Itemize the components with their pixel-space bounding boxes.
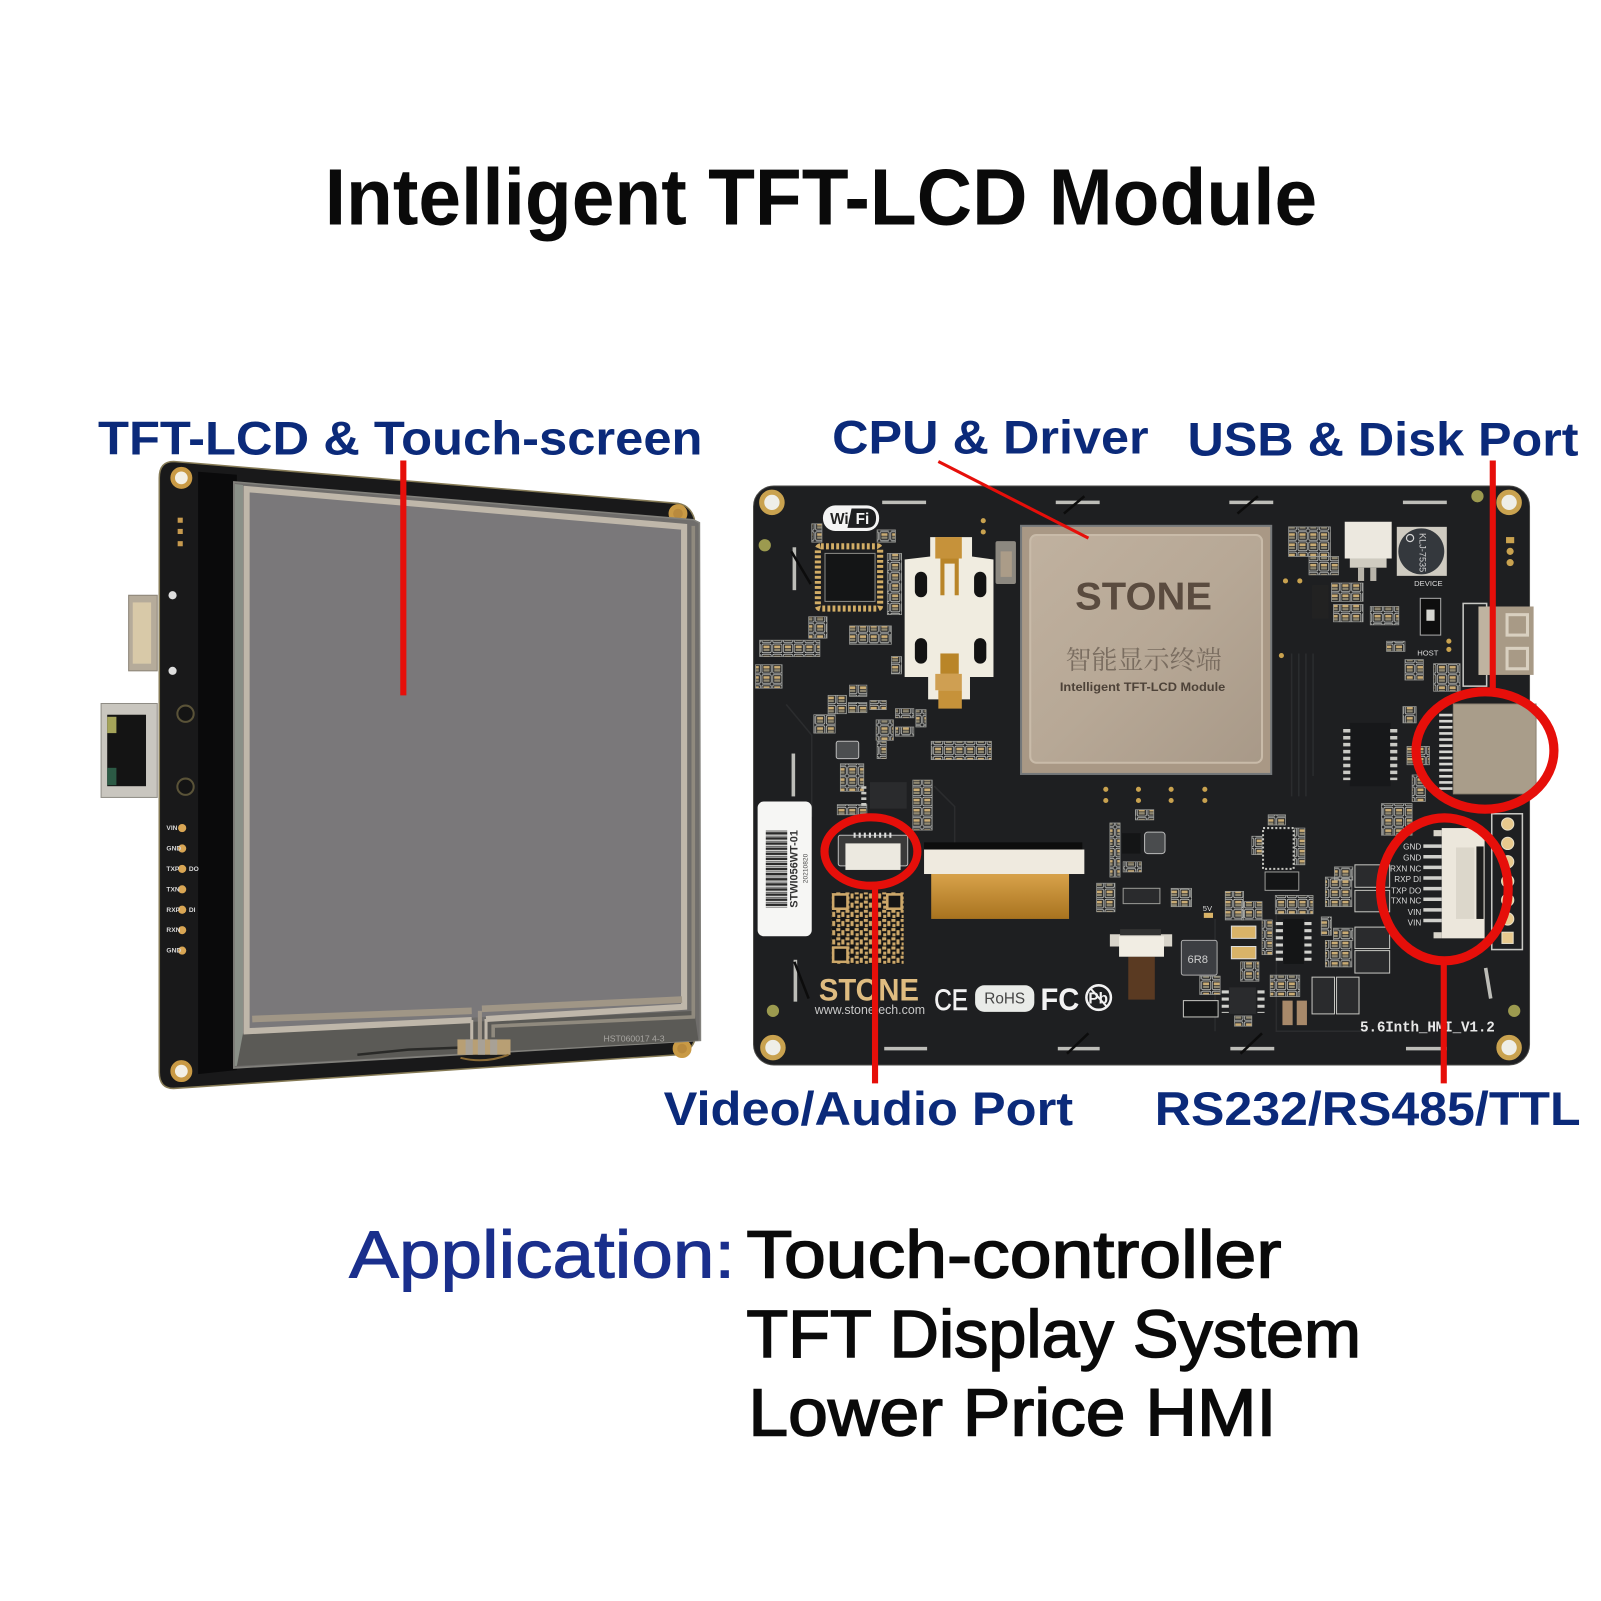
- inductor: KLJ-7535: [1417, 533, 1427, 572]
- yellow capacitors: [1231, 926, 1256, 959]
- DIP switch: [1420, 598, 1441, 635]
- power inductor 6R8: 6R8: [1187, 954, 1208, 966]
- push button: [996, 541, 1016, 584]
- gold test points: [981, 518, 1514, 803]
- serial pin labels: GND: [1403, 843, 1421, 852]
- WiFi badge: [823, 505, 879, 531]
- panel: screen-side view of module: [101, 462, 700, 1088]
- CPU Chinese caption: 智能显示终端: [1066, 640, 1222, 677]
- edge slots: [793, 502, 1491, 1049]
- serial pin labels: RXP DI: [1394, 875, 1421, 884]
- coin cell holder: [905, 537, 993, 709]
- two-pin white connector: [1345, 522, 1392, 581]
- circuit board edge: [159, 462, 694, 1088]
- side pin labels: GND: [166, 846, 181, 853]
- adhesive wave on glass: [357, 1048, 459, 1055]
- serial connector: [1433, 828, 1485, 938]
- side pin labels: RXN: [166, 927, 181, 934]
- side pin labels: TXP: [166, 866, 180, 873]
- side pin labels: RXP: [166, 907, 181, 914]
- certification marks: CE: [934, 984, 968, 1017]
- title: Intelligent TFT-LCD Module: [325, 153, 1317, 242]
- application heading: Application:: [349, 1218, 735, 1292]
- flex tail: [457, 1039, 511, 1060]
- side pin labels: VIN: [166, 825, 178, 832]
- label: USB & Disk Port: USB & Disk Port: [1187, 412, 1579, 465]
- board brand: STONE: [819, 972, 919, 1008]
- USB port on side: [129, 595, 157, 671]
- WiFi badge: Fi: [856, 511, 869, 528]
- glass part code: HST060017 4-3: [603, 1033, 665, 1043]
- inductor: [1397, 527, 1447, 576]
- serial pin labels: TXP DO: [1391, 886, 1421, 895]
- certification marks: Pb: [1088, 991, 1108, 1008]
- board mounting holes: [173, 469, 689, 1080]
- serial pin labels: VIN: [1408, 908, 1421, 917]
- Ethernet port on side: [101, 704, 157, 797]
- pointer: serial line: [1441, 962, 1447, 1083]
- QFN chip: [818, 546, 880, 609]
- highlight ring: USB and disk port: [1416, 692, 1554, 809]
- 5V test pads: 5V: [1203, 904, 1213, 913]
- label: Video/Audio Port: Video/Audio Port: [664, 1082, 1074, 1135]
- pointer: CPU line: [938, 462, 1088, 538]
- board version text: 5.6Inth_HMI_V1.2: [1360, 1020, 1495, 1036]
- serial pin labels: VIN: [1408, 919, 1421, 928]
- 5V test pads: [1203, 904, 1213, 918]
- side pin labels: [166, 825, 199, 955]
- LCD flat connector and ribbon: [924, 842, 1084, 919]
- board: [754, 486, 1530, 1065]
- slot dark diagonals: [791, 496, 1262, 1054]
- touch glass: [234, 482, 700, 1068]
- switch label HOST: HOST: [1417, 649, 1439, 658]
- serial pin labels: GND: [1403, 854, 1421, 863]
- glass bottom strip: [237, 1011, 698, 1066]
- application list: Lower Price HMI: [748, 1377, 1276, 1451]
- SD / disk socket: [1446, 704, 1536, 794]
- certification marks: [934, 981, 1111, 1017]
- QR code: [831, 892, 904, 964]
- SMD component clusters: [756, 524, 1460, 1026]
- label: RS232/RS485/TTL: RS232/RS485/TTL: [1155, 1082, 1581, 1135]
- power inductor 6R8: [1181, 940, 1217, 975]
- label: TFT-LCD & Touch-screen: TFT-LCD & Touch-screen: [98, 411, 702, 464]
- certification marks: FC: [1040, 981, 1079, 1017]
- highlight ring: video port: [824, 817, 917, 886]
- serial pin labels: [1390, 843, 1421, 928]
- ethernet IC: [1347, 723, 1394, 786]
- side pin labels: DI: [189, 907, 196, 914]
- certification marks: RoHS: [984, 991, 1025, 1008]
- CPU English caption: Intelligent TFT-LCD Module: [1060, 681, 1226, 694]
- side pin labels: GND: [166, 948, 181, 955]
- switch label DEVICE: DEVICE: [1414, 579, 1443, 588]
- board URL: www.stonetech.com: [814, 1002, 925, 1017]
- WiFi badge: Wi: [830, 511, 849, 528]
- small FPC connector: [1110, 929, 1172, 1000]
- pointer: TFT-LCD line: [400, 460, 406, 695]
- pointer: video line: [872, 888, 878, 1083]
- label: CPU & Driver: CPU & Driver: [832, 410, 1149, 463]
- glass left edge: [235, 484, 243, 1066]
- USB-A connector: [1463, 603, 1534, 686]
- small olive pads: [759, 490, 1520, 1017]
- pointer: USB line: [1490, 460, 1496, 692]
- side pin labels: TXN: [166, 886, 180, 893]
- display area: [248, 492, 684, 1029]
- application list: TFT Display System: [746, 1298, 1361, 1372]
- side pin labels: DO: [189, 866, 199, 873]
- side pads and vias: [168, 518, 194, 955]
- mounting holes: [762, 492, 1519, 1058]
- application list: [746, 1218, 1361, 1451]
- video connector: [838, 835, 908, 870]
- serial pin labels: RXN NC: [1390, 864, 1421, 873]
- panel: circuit board rear view: [754, 486, 1536, 1065]
- highlight ring: serial port: [1381, 818, 1508, 961]
- black display housing: [198, 472, 237, 1074]
- serial label sticker: 20210820: [803, 853, 810, 883]
- serial pin labels: TXN NC: [1391, 897, 1421, 906]
- serial label sticker: [758, 802, 812, 936]
- small chips and inductors: [836, 585, 1390, 1025]
- faint traces: [786, 653, 1368, 1031]
- serial label sticker: STWI056WT-01: [788, 830, 800, 908]
- edge header box and pads: [1492, 814, 1522, 950]
- application list: Touch-controller: [746, 1218, 1281, 1292]
- CPU heatsink: [1021, 526, 1271, 774]
- beige touch frame: [247, 489, 693, 1039]
- CPU brand: STONE: [1075, 576, 1212, 619]
